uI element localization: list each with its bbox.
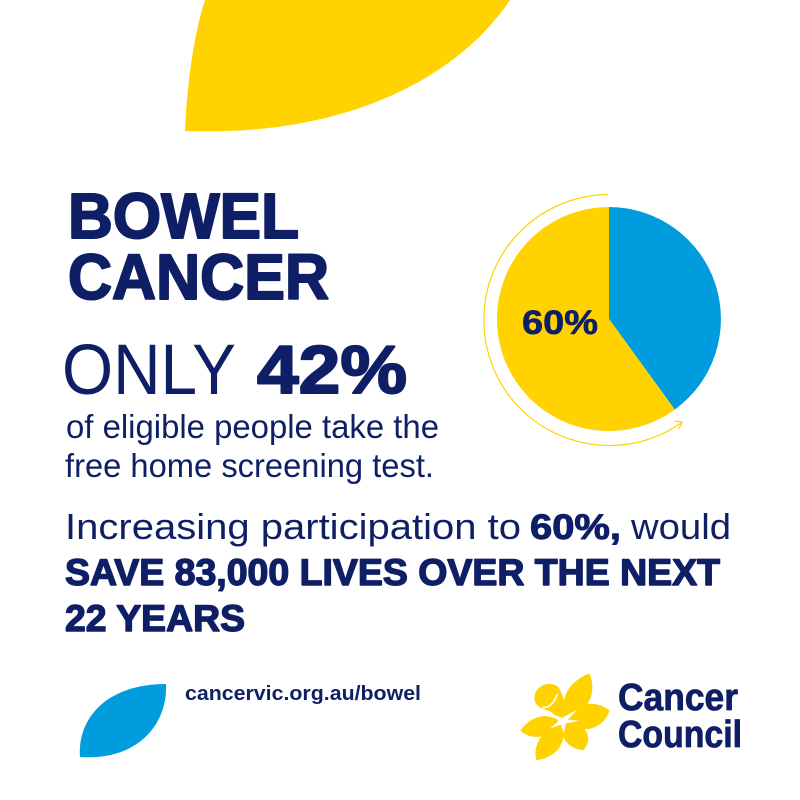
logo: cancer council	[521, 674, 742, 760]
text: save 83,000 lives: 22 YEARS	[65, 598, 245, 639]
pie chart	[484, 194, 721, 445]
logo wordmark: Cancer	[618, 677, 738, 719]
statistic: only 42%	[62, 331, 407, 410]
link: website: cancervic.org.au/bowel	[185, 683, 421, 705]
text: save 83,000 lives	[65, 552, 720, 639]
text: increasing participation: 60%,	[530, 508, 621, 547]
text: eligible people: free home screening test.	[65, 447, 434, 484]
arrow: circular	[484, 194, 682, 445]
text: eligible people: of eligible people take the	[66, 408, 439, 445]
icon: daffodil centre star	[550, 709, 580, 734]
icon: daffodil	[521, 674, 609, 760]
pie slice: yellow 60%	[497, 207, 675, 431]
heading: bowel cancer	[68, 180, 329, 313]
pie slice: blue 40%	[609, 207, 721, 410]
heading: bowel cancer: BOWEL	[68, 180, 299, 252]
text: save 83,000 lives: SAVE 83,000 LIVES OVER THE NEXT	[65, 552, 720, 593]
text: eligible people	[65, 408, 439, 484]
text: increasing participation: Increasing participation to	[65, 506, 521, 547]
heading: bowel cancer: CANCER	[68, 241, 329, 313]
logo wordmark	[618, 677, 742, 756]
logo wordmark: Council	[618, 714, 742, 756]
statistic: only 42%: ONLY	[62, 331, 236, 410]
icon: blue leaf	[80, 684, 166, 757]
statistic: only 42%: 42%	[257, 332, 407, 408]
text: increasing participation: would	[630, 506, 731, 547]
pie label: 60%	[522, 304, 598, 342]
text: increasing participation	[65, 506, 731, 547]
decorative yellow leaf	[185, 0, 510, 131]
